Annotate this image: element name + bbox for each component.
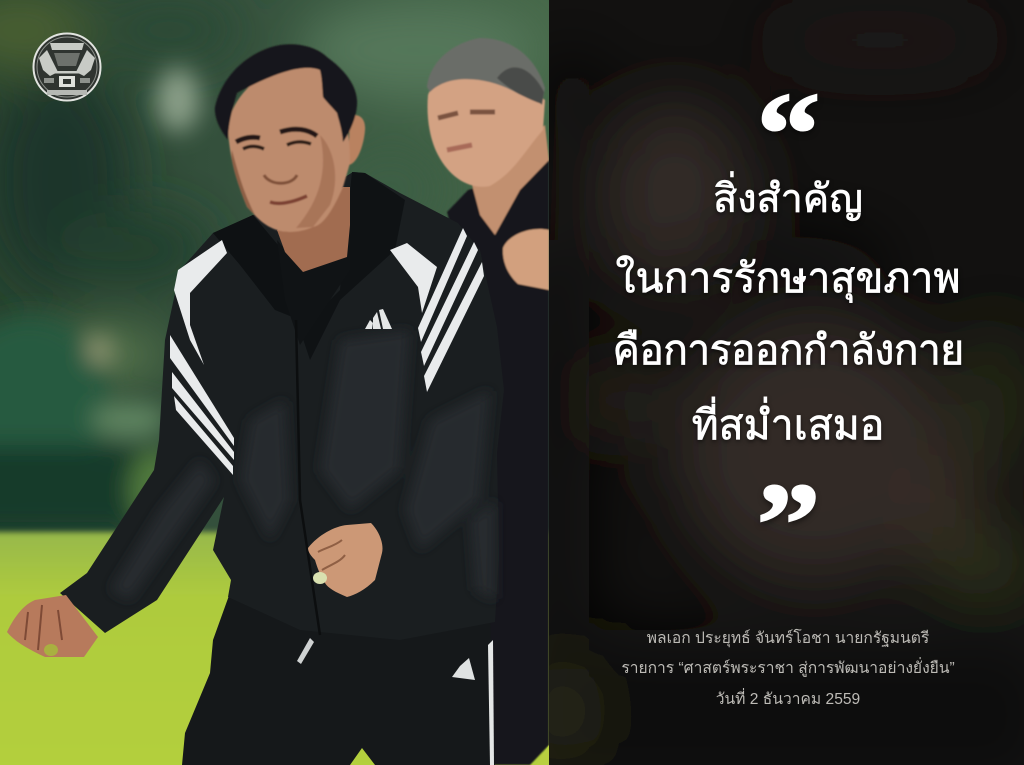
mouth: [270, 196, 307, 203]
trouser logo and stripe: [452, 658, 475, 680]
zip: [296, 320, 320, 635]
eyebrows: [236, 129, 317, 142]
trousers: [182, 590, 495, 765]
right fist: [308, 523, 383, 597]
adidas chest logo: [365, 309, 392, 329]
attribution: พลเอก ประยุทธ์ จันทร์โอชา นายกรัฐมนตรี: [647, 630, 929, 647]
hair: [215, 44, 357, 142]
quote text: คือการออกกำลังกาย: [612, 327, 964, 373]
face shading: [296, 135, 335, 228]
quote text: ในการรักษาสุขภาพ: [616, 255, 960, 301]
seal disc: [34, 34, 100, 100]
attribution: รายการ “ศาสตร์พระราชา สู่การพัฒนาอย่างยั่งยืน”: [621, 660, 955, 677]
left blurred garden background: [0, 0, 580, 765]
polo shirt: [277, 240, 343, 344]
neck: [277, 187, 350, 272]
attribution: วันที่ 2 ธันวาคม 2559: [716, 691, 860, 708]
ear: [348, 115, 365, 165]
shoulder stripes: [170, 228, 484, 475]
quote text: ที่สม่ำเสมอ: [692, 402, 884, 448]
left fist: [7, 595, 98, 657]
attribution: [621, 628, 955, 708]
second man behind: [427, 38, 549, 765]
government seal: [34, 34, 100, 100]
face: [228, 59, 350, 232]
second man hair: [427, 38, 545, 105]
nose: [264, 175, 297, 183]
text: ”: [757, 459, 820, 590]
collar: [213, 215, 290, 316]
eyes: [243, 142, 311, 149]
second man fist: [503, 229, 549, 290]
jacket body: [60, 172, 504, 640]
second man face: [427, 74, 545, 187]
quote text: [612, 171, 964, 448]
ring: [313, 572, 327, 584]
right dark blurred panel: [520, 0, 1024, 765]
second man eyes and mouth: [438, 112, 495, 118]
jacket fold highlights: [110, 330, 495, 600]
main man: [7, 44, 504, 765]
second man neck: [472, 125, 549, 235]
quote text: สิ่งสำคัญ: [713, 177, 863, 221]
second man jacket: [447, 158, 549, 765]
text: “: [757, 68, 820, 199]
seal emblem: [39, 43, 95, 95]
